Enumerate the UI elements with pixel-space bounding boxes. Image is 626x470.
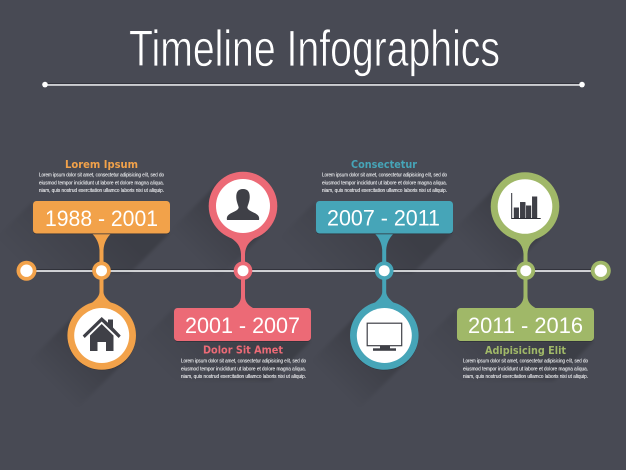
heading: Consectetur: Consectetur [351, 160, 417, 171]
date box: 2011 - 2016 [468, 313, 583, 338]
date box [457, 308, 594, 342]
icon circle: monitor [350, 301, 419, 370]
heading: Lorem Ipsum: Lorem Ipsum [65, 160, 138, 171]
panel: 1988 - 2001 [33, 160, 170, 370]
date box: 1988 - 2001 [45, 206, 158, 231]
timeline node [375, 261, 394, 280]
heading: Adipisicing Elit: Adipisicing Elit [485, 346, 566, 357]
timeline node [516, 261, 535, 280]
panel: 2001 - 2007 [174, 172, 311, 380]
text block: eiusmod tempor incididunt ut labore et dolore magna aliqua. [39, 180, 164, 186]
text block: niam, quis nostrud exercitation ullamco laboris nisi ut aliquip. [39, 188, 164, 194]
icon circle: house [67, 301, 136, 370]
timeline node [92, 261, 111, 280]
text block: niam, quis nostrud exercitation ullamco laboris nisi ut aliquip. [181, 374, 306, 380]
date box [174, 308, 311, 342]
text block [39, 172, 164, 194]
text block: eiusmod tempor incididunt ut labore et dolore magna aliqua. [463, 366, 588, 372]
title underline [42, 82, 585, 87]
text block: Lorem ipsum dolor sit amet, consectetur adipisicing elit, sed do [39, 172, 164, 178]
timeline node [234, 261, 252, 280]
connector [370, 233, 398, 306]
connector [231, 238, 255, 308]
text block: niam, quis nostrud exercitation ullamco laboris nisi ut aliquip. [322, 188, 447, 194]
panel: 2007 - 2011 [316, 160, 453, 370]
connector [88, 233, 116, 306]
text block: Lorem ipsum dolor sit amet, consectetur adipisicing elit, sed do [322, 172, 447, 178]
timeline axis [27, 269, 600, 272]
connector [514, 238, 538, 308]
timeline start node [16, 261, 36, 281]
text block: Lorem ipsum dolor sit amet, consectetur adipisicing elit, sed do [181, 358, 306, 364]
date box [33, 201, 170, 234]
heading: Dolor Sit Amet: Dolor Sit Amet [203, 346, 283, 356]
date box [316, 201, 453, 234]
icon circle: person [209, 172, 277, 240]
text block: eiusmod tempor incididunt ut labore et dolore magna aliqua. [181, 366, 306, 372]
text block [322, 172, 447, 194]
text block [181, 358, 306, 380]
panel: 2011 - 2016 [457, 172, 594, 380]
text block: niam, quis nostrud exercitation ullamco laboris nisi ut aliquip. [463, 374, 588, 380]
text block: Lorem ipsum dolor sit amet, consectetur adipisicing elit, sed do [463, 358, 588, 364]
icon circle: bar chart [491, 172, 559, 241]
date box: 2007 - 2011 [327, 206, 440, 231]
text block: eiusmod tempor incididunt ut labore et dolore magna aliqua. [322, 180, 447, 186]
timeline end node [591, 261, 611, 281]
text block [463, 358, 588, 380]
long shadows [0, 182, 594, 410]
title: Timeline Infographics [129, 20, 500, 77]
date box: 2001 - 2007 [185, 313, 300, 338]
